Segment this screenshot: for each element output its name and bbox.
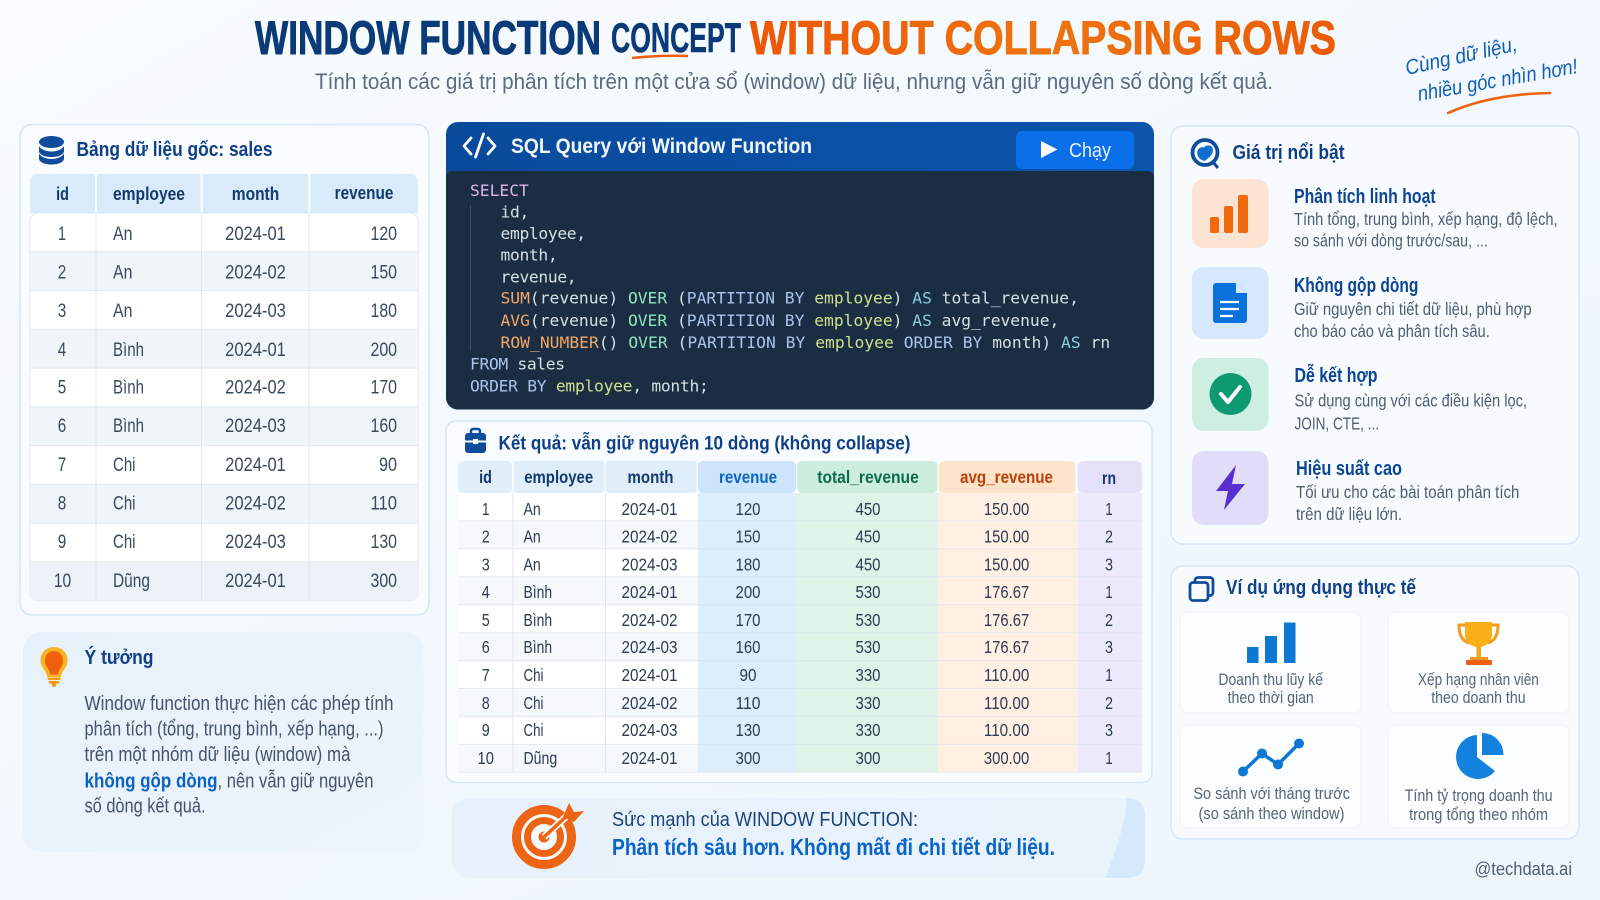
- code block: employee,: [500, 224, 586, 243]
- item: no row collapse: [1192, 267, 1532, 341]
- row 4: 2024-01: [225, 340, 286, 361]
- row 1: 120: [370, 224, 397, 245]
- example: month comparison: So sánh với tháng trước: [1193, 785, 1350, 803]
- title: WINDOW FUNCTION: [255, 11, 601, 64]
- row 2: 2: [58, 263, 66, 284]
- row 3: 180: [370, 301, 397, 322]
- result row 1: 450: [856, 499, 881, 519]
- result row 1: 150.00: [984, 499, 1030, 519]
- result row 10: 300.00: [984, 748, 1030, 768]
- item: flexible analysis: so sánh với dòng trước/sau, ...: [1294, 230, 1488, 250]
- code block: FROM sales: [470, 354, 565, 374]
- idea body text: không gộp dòng: [84, 770, 218, 792]
- row 6: [58, 416, 397, 437]
- title: CONCEPT: [611, 14, 741, 61]
- heading: SQL query: SQL Query với Window Function: [511, 135, 812, 158]
- handwritten note: [1403, 33, 1580, 113]
- callout text: Phân tích sâu hơn. Không mất đi chi tiết dữ liệu.: [612, 834, 1055, 860]
- row 4: Bình: [113, 340, 144, 361]
- result row 8: 110: [736, 693, 761, 713]
- item: high performance: [1192, 451, 1519, 525]
- result row 7: 7: [482, 665, 490, 685]
- result row 7: 2024-01: [622, 665, 678, 685]
- result table header: total_revenue: [817, 467, 919, 487]
- row 3: [58, 301, 397, 322]
- result row 7: 1: [1105, 665, 1113, 685]
- icon: database: [39, 136, 64, 164]
- row 10: 10: [54, 571, 71, 592]
- result table header: id: [479, 467, 492, 487]
- code block: ROW_NUMBER() OVER (PARTITION BY employee ORDER BY month) AS rn: [500, 333, 1110, 352]
- result row 3: 3: [1105, 555, 1113, 575]
- example: month comparison: (so sánh theo window): [1199, 805, 1344, 823]
- item: no row collapse: cho báo cáo và phân tích sâu.: [1294, 321, 1490, 341]
- button: run: Chạy: [1069, 140, 1111, 162]
- idea body text: Window function thực hiện các phép tính: [84, 692, 394, 715]
- row 3: 2024-03: [225, 301, 286, 322]
- table header: employee: [113, 183, 185, 204]
- result table header: month: [628, 467, 674, 487]
- result row 4: 530: [856, 582, 881, 602]
- example: cumulative revenue: [1180, 612, 1361, 713]
- result row 9: 330: [856, 720, 881, 740]
- result row 5: Bình: [524, 610, 552, 630]
- row 2: [58, 263, 397, 284]
- row 5: 170: [370, 378, 397, 399]
- row 4: [58, 340, 397, 361]
- result row 9: Chi: [524, 720, 544, 740]
- item: high performance: Hiệu suất cao: [1296, 458, 1402, 480]
- result row 10: 10: [478, 748, 494, 768]
- result row 2: 150: [736, 527, 761, 547]
- result row 4: 1: [1105, 582, 1113, 602]
- item: no row collapse: Không gộp dòng: [1294, 275, 1418, 297]
- row 8: 2024-02: [225, 494, 286, 515]
- item: no row collapse: Giữ nguyên chi tiết dữ liệu, phù hợp: [1294, 299, 1532, 319]
- row 8: [58, 494, 397, 515]
- example: cumulative revenue: theo thời gian: [1228, 689, 1314, 707]
- result row 9: 130: [736, 720, 761, 740]
- row 8: Chi: [113, 494, 136, 515]
- result row 3: 2024-03: [622, 555, 678, 575]
- result row 1: 2024-01: [622, 499, 678, 519]
- item: easy to combine: [1192, 358, 1527, 434]
- code block: [470, 181, 1110, 396]
- code block: month,: [500, 246, 557, 264]
- result row 10: 2024-01: [622, 748, 678, 768]
- result row 10: 300: [856, 748, 881, 768]
- result row 2: 2: [1105, 527, 1113, 547]
- row 4: 4: [58, 340, 67, 361]
- handwritten note: nhiều góc nhìn hơn!: [1416, 55, 1580, 106]
- row 8: 8: [58, 494, 66, 515]
- result row 6: 176.67: [984, 637, 1029, 657]
- result row 5: 530: [856, 610, 881, 630]
- result row 2: [482, 527, 1113, 547]
- result row 5: 176.67: [984, 610, 1029, 630]
- result row 3: An: [524, 555, 541, 575]
- row 9: Chi: [113, 532, 136, 553]
- result row 6: 530: [856, 637, 881, 657]
- item: flexible analysis: Phân tích linh hoạt: [1294, 186, 1436, 208]
- example: employee ranking: [1388, 612, 1569, 713]
- result row 1: An: [524, 499, 541, 519]
- subtitle: Tính toán các giá trị phân tích trên một cửa sổ (window) dữ liệu, nhưng vẫn giữ nguyên số dòng kết quả.: [315, 69, 1273, 94]
- icon: code: [464, 134, 495, 157]
- icon: search with heart: [1192, 140, 1218, 168]
- example: employee ranking: Xếp hạng nhân viên: [1418, 671, 1539, 689]
- row 7: Chi: [113, 455, 136, 476]
- result table header: avg_revenue: [960, 467, 1053, 487]
- result row 6: 160: [736, 637, 761, 657]
- panel: SQL query: [446, 122, 1154, 410]
- row 5: [58, 378, 397, 399]
- table: sales: [30, 174, 418, 601]
- code block: revenue,: [500, 268, 576, 286]
- result row 8: 8: [482, 693, 490, 713]
- row 5: Bình: [113, 378, 144, 399]
- callout text: Sức mạnh của WINDOW FUNCTION:: [612, 809, 918, 831]
- result table header: employee: [524, 467, 593, 487]
- item: easy to combine: Dễ kết hợp: [1294, 363, 1378, 387]
- result row 5: 170: [736, 610, 761, 630]
- callout: power of window function: [452, 798, 1145, 878]
- row 2: 150: [370, 263, 397, 284]
- row 3: 3: [58, 301, 66, 322]
- result row 5: 2: [1105, 610, 1113, 630]
- result row 3: 180: [736, 555, 761, 575]
- idea body text: phân tích (tổng, trung bình, xếp hạng, ...): [84, 718, 384, 740]
- code block: AVG(revenue) OVER (PARTITION BY employee) AS avg_revenue,: [500, 311, 1059, 330]
- row 8: 110: [370, 494, 397, 515]
- example: month comparison: [1180, 725, 1361, 828]
- result table: [458, 461, 1142, 772]
- row 2: 2024-02: [225, 263, 286, 284]
- result table header: [458, 461, 1142, 493]
- row 9: [58, 532, 397, 553]
- item: easy to combine: JOIN, CTE, ...: [1294, 414, 1379, 434]
- row 7: [58, 455, 397, 476]
- example: revenue share: trong tổng theo nhóm: [1409, 806, 1548, 824]
- example: employee ranking: theo doanh thu: [1431, 689, 1526, 707]
- result row 2: An: [524, 527, 541, 547]
- result row 7: 110.00: [984, 665, 1030, 685]
- panel: idea: [23, 632, 424, 852]
- row 6: 160: [370, 416, 397, 437]
- row 9: 130: [370, 532, 397, 553]
- table header: revenue: [335, 182, 393, 203]
- result row 8: 110.00: [984, 693, 1030, 713]
- heading: key values: Giá trị nổi bật: [1232, 141, 1345, 164]
- result row 1: 1: [1105, 499, 1113, 519]
- idea body text: số dòng kết quả.: [84, 794, 206, 818]
- code block: ORDER BY employee, month;: [470, 376, 709, 396]
- result row 3: 3: [482, 555, 490, 575]
- result row 7: [482, 665, 1113, 685]
- result row 8: Chi: [524, 693, 544, 713]
- item: easy to combine: Sử dụng cùng với các điều kiện lọc,: [1294, 390, 1527, 410]
- result row 2: 450: [856, 527, 881, 547]
- title: [255, 11, 1336, 64]
- button: run: [1016, 131, 1134, 169]
- result row 9: 3: [1105, 720, 1113, 740]
- title: WITHOUT COLLAPSING ROWS: [750, 11, 1336, 64]
- icon: target: [516, 803, 584, 864]
- row 6: 2024-03: [225, 416, 286, 437]
- result row 4: Bình: [524, 582, 552, 602]
- item: high performance: trên dữ liệu lớn.: [1296, 504, 1402, 524]
- idea body text: [84, 692, 394, 818]
- result row 9: 2024-03: [622, 720, 678, 740]
- row 10: Dũng: [113, 571, 150, 592]
- result row 6: Bình: [524, 637, 552, 657]
- result row 3: 450: [856, 555, 881, 575]
- code block: id,: [500, 202, 529, 222]
- row 7: 2024-01: [225, 455, 286, 476]
- result row 8: 2: [1105, 693, 1113, 713]
- code block: SELECT: [470, 181, 529, 200]
- row 3: An: [113, 301, 132, 322]
- result row 8: 330: [856, 693, 881, 713]
- panel: source table: [20, 124, 429, 615]
- result row 9: 9: [482, 720, 490, 740]
- result row 4: 176.67: [984, 582, 1029, 602]
- result table header: revenue: [719, 467, 777, 487]
- row 6: Bình: [113, 416, 144, 437]
- row 1: 1: [58, 224, 66, 245]
- item: flexible analysis: [1192, 179, 1558, 250]
- icon: light bulb: [40, 647, 68, 687]
- idea body text: trên một nhóm dữ liệu (window) mà: [84, 743, 351, 766]
- result row 10: 300: [736, 748, 761, 768]
- heading: result: Kết quả: vẫn giữ nguyên 10 dòng (không collapse): [498, 430, 910, 454]
- row 10: 300: [370, 571, 397, 592]
- heading: idea: Ý tưởng: [84, 645, 154, 669]
- result row 1: 1: [482, 499, 489, 519]
- result row 10: [478, 748, 1113, 768]
- example: cumulative revenue: Doanh thu lũy kế: [1218, 671, 1323, 689]
- row 10: 2024-01: [225, 571, 286, 592]
- result row 6: 6: [482, 637, 490, 657]
- row 4: 200: [370, 340, 397, 361]
- result row 4: 200: [736, 582, 761, 602]
- result table header: rn: [1102, 468, 1116, 488]
- row 2: An: [113, 263, 132, 284]
- table header: month: [232, 183, 279, 204]
- credit: @techdata.ai: [1474, 859, 1572, 879]
- panel: key values: [1171, 126, 1579, 544]
- result row 1: [482, 499, 1113, 519]
- example: revenue share: Tính tỷ trọng doanh thu: [1405, 787, 1553, 805]
- row 1: [58, 224, 397, 245]
- row 5: 2024-02: [225, 378, 286, 399]
- icon: layers: [1190, 578, 1213, 600]
- table header: id: [56, 183, 69, 204]
- example: revenue share: [1388, 725, 1569, 828]
- result row 5: 2024-02: [622, 610, 678, 630]
- row 9: 2024-03: [225, 532, 286, 553]
- row 6: 6: [58, 416, 66, 437]
- item: flexible analysis: Tính tổng, trung bình, xếp hạng, độ lệch,: [1294, 209, 1558, 229]
- result row 7: 330: [856, 665, 881, 685]
- result row 8: 2024-02: [622, 693, 678, 713]
- item: high performance: Tối ưu cho các bài toán phân tích: [1296, 482, 1519, 502]
- result row 7: Chi: [524, 665, 544, 685]
- result row 6: 3: [1105, 637, 1113, 657]
- result row 6: 2024-03: [622, 637, 678, 657]
- table header: [30, 174, 418, 213]
- row 1: 2024-01: [225, 224, 286, 245]
- panel: result table: [446, 421, 1152, 782]
- result row 3: 150.00: [984, 555, 1030, 575]
- result row 10: Dũng: [524, 748, 557, 768]
- row 5: 5: [58, 378, 66, 399]
- result row 5: 5: [482, 610, 490, 630]
- result row 2: 150.00: [984, 527, 1030, 547]
- row 1: An: [113, 224, 132, 245]
- result row 7: 90: [740, 665, 757, 685]
- result row 5: [482, 610, 1113, 630]
- result row 2: 2: [482, 527, 490, 547]
- result row 2: 2024-02: [622, 527, 678, 547]
- result row 6: [482, 637, 1113, 657]
- row 7: 7: [58, 455, 66, 476]
- result row 10: 1: [1105, 748, 1113, 768]
- callout text: [612, 809, 1055, 860]
- heading: practical examples: Ví dụ ứng dụng thực tế: [1226, 576, 1416, 599]
- heading: source table: Bảng dữ liệu gốc: sales: [76, 138, 272, 161]
- result row 9: 110.00: [984, 720, 1030, 740]
- handwritten note: Cùng dữ liệu,: [1403, 33, 1519, 80]
- result row 1: 120: [736, 499, 761, 519]
- panel: practical examples: [1171, 566, 1579, 839]
- result row 4: 2024-01: [622, 582, 678, 602]
- result row 4: 4: [482, 582, 490, 602]
- idea body text: , nên vẫn giữ nguyên: [218, 770, 374, 792]
- result row 4: [482, 582, 1113, 602]
- result row 3: [482, 555, 1113, 575]
- icon: clipboard: [465, 429, 486, 453]
- result row 9: [482, 720, 1113, 740]
- code block: SUM(revenue) OVER (PARTITION BY employee) AS total_revenue,: [500, 288, 1079, 308]
- row 9: 9: [58, 532, 66, 553]
- row 10: [54, 571, 397, 592]
- row 7: 90: [379, 455, 397, 476]
- result row 8: [482, 693, 1113, 713]
